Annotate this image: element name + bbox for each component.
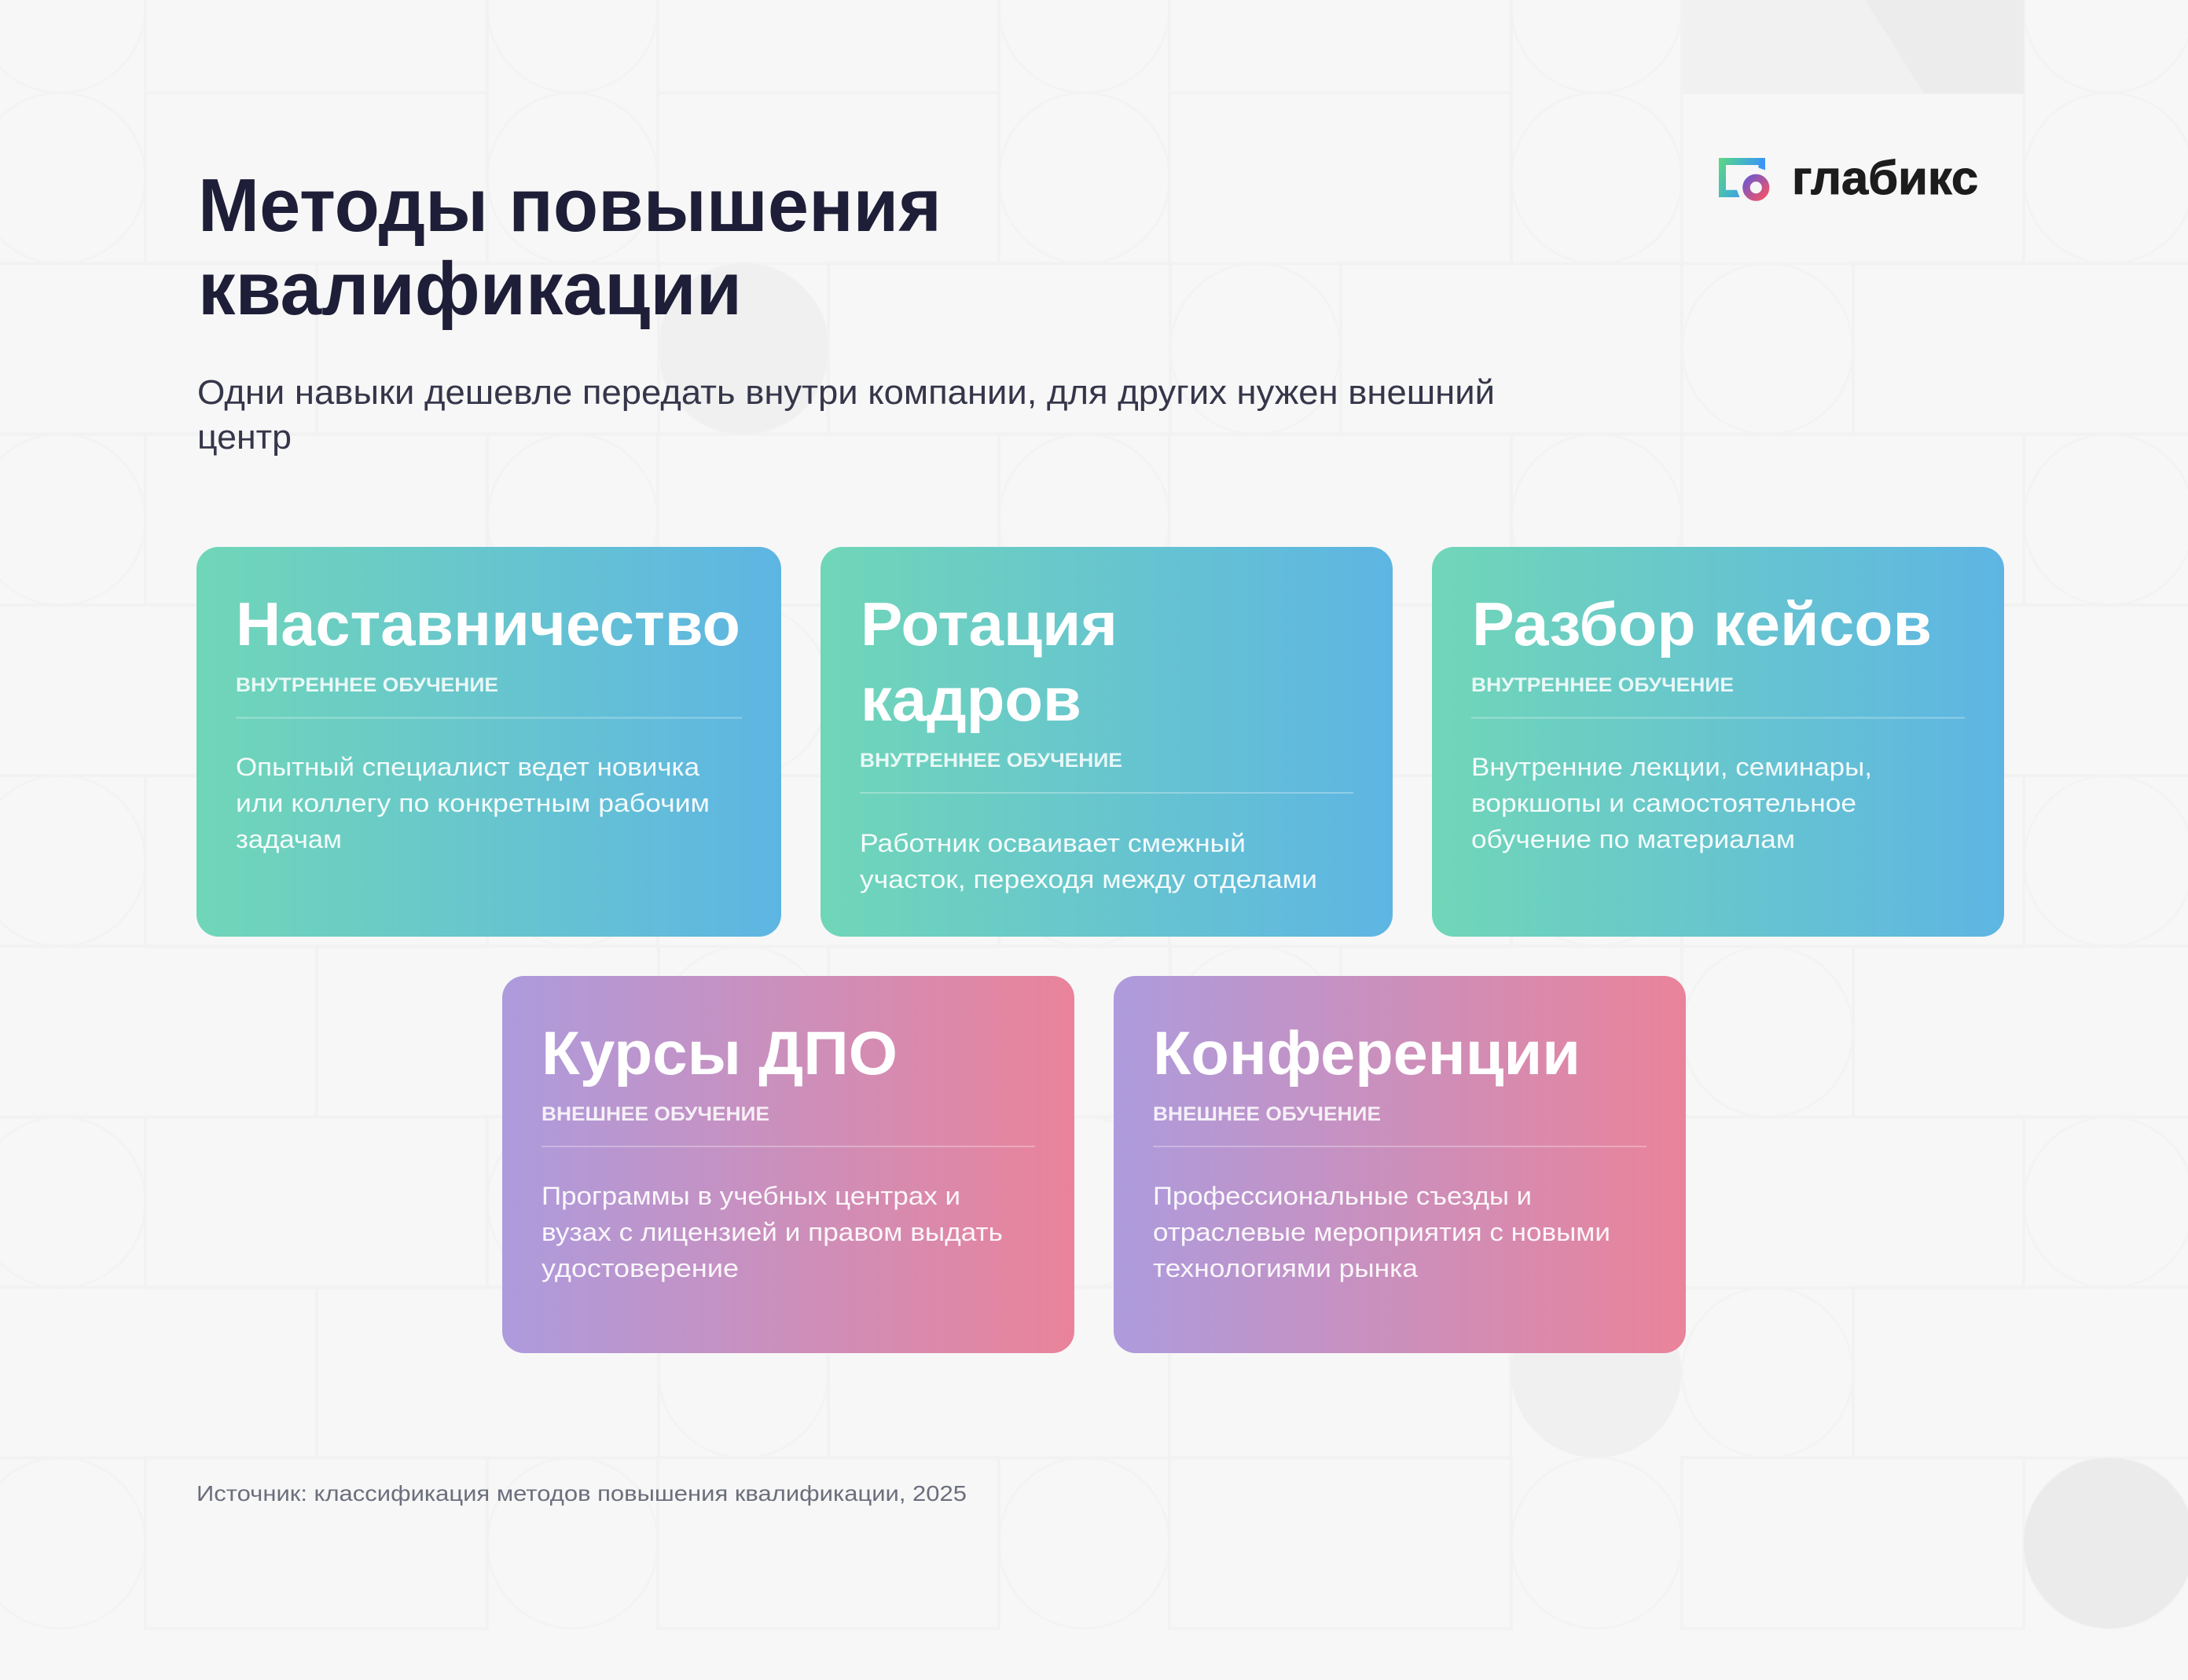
icon: logo frame and ring [1719,158,1766,197]
panel: Разбор кейсов: обучение по материалам [1471,825,1795,853]
panel: Разбор кейсов: воркшопы и самостоятельное [1471,789,1856,817]
panel: Ротация кадров: Работник осваивает смежный [860,829,1246,857]
subtitle: Одни навыки дешевле передать внутри компании, для других нужен внешний [197,373,1495,412]
panel: Курсы ДПО: удостоверение [541,1254,739,1282]
panel: Конференции: технологиями рынка [1153,1254,1418,1282]
panel: Ротация кадров: кадров [861,665,1081,734]
panel: Наставничество: ВНУТРЕННЕЕ ОБУЧЕНИЕ [236,674,498,696]
panel: Наставничество [196,547,781,937]
title: квалификации [198,247,742,331]
panel: Разбор кейсов: Разбор кейсов [1472,589,1932,658]
subtitle: центр [197,418,292,457]
panel: Ротация кадров [820,547,1393,937]
panel: Ротация кадров: ВНУТРЕННЕЕ ОБУЧЕНИЕ [860,750,1122,772]
panel: Курсы ДПО: Курсы ДПО [541,1018,898,1088]
panel: Курсы ДПО: ВНЕШНЕЕ ОБУЧЕНИЕ [541,1103,769,1125]
panel: Конференции: Профессиональные съезды и [1153,1182,1532,1210]
panel: Конференции [1114,976,1686,1353]
panel: Конференции: отраслевые мероприятия с новыми [1153,1218,1610,1246]
panel: Ротация кадров: Ротация [861,589,1118,658]
logo [1719,152,1978,204]
panel: Наставничество: задачам [236,825,342,853]
title [198,163,942,331]
panel: Курсы ДПО: вузах с лицензией и правом выдать [541,1218,1003,1246]
logo wordmark: глабикс [1792,152,1978,204]
title: Методы повышения [198,163,942,248]
source note: Источник: классификация методов повышения квалификации, 2025 [196,1481,967,1506]
panel: Разбор кейсов: Внутренние лекции, семинары, [1471,753,1872,781]
panel: Наставничество: или коллегу по конкретным рабочим [236,789,710,817]
panel: Конференции: ВНЕШНЕЕ ОБУЧЕНИЕ [1153,1103,1381,1125]
panel: Конференции: Конференции [1153,1018,1580,1088]
panel: Наставничество: Опытный специалист ведет новичка [236,753,699,781]
panel: Ротация кадров: участок, переходя между отделами [860,865,1317,893]
panel: Курсы ДПО [502,976,1074,1353]
subtitle [197,373,1495,457]
panel: Разбор кейсов [1432,547,2004,937]
panel: Разбор кейсов: ВНУТРЕННЕЕ ОБУЧЕНИЕ [1471,674,1734,696]
panel: Курсы ДПО: Программы в учебных центрах и [541,1182,960,1210]
panel: Наставничество: Наставничество [236,589,740,658]
